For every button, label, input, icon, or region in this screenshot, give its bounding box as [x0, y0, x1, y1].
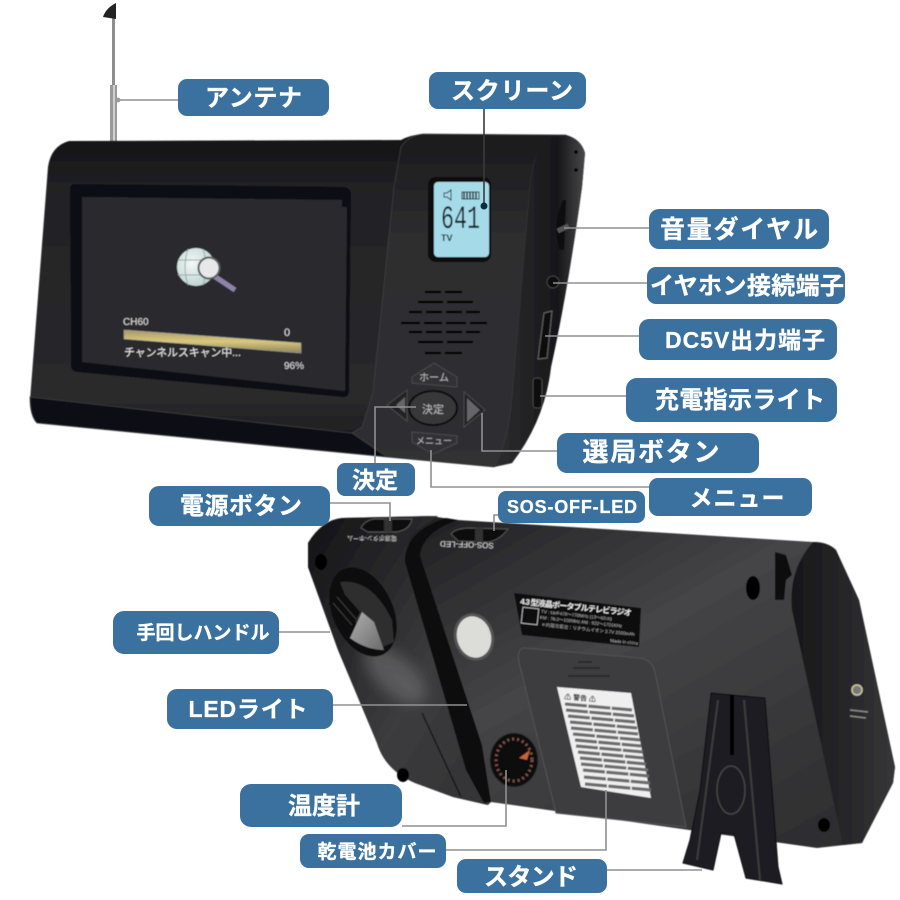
scan status text: チャンネルスキャン中...	[124, 346, 241, 359]
kickstand	[683, 693, 782, 884]
label: アンテナ	[178, 79, 329, 116]
battery door seam	[422, 713, 461, 797]
leader lines	[116, 98, 702, 870]
label: 乾電池カバー	[300, 834, 446, 868]
label: イヤホン接続端子: イヤホン接続端子	[650, 273, 844, 300]
label: 決定: 決定	[352, 467, 398, 493]
front device photo	[30, 134, 585, 467]
label: 電源ボタン: 電源ボタン	[180, 493, 302, 520]
dark seam stripe	[405, 518, 491, 803]
warning sticker	[557, 687, 651, 798]
back device photo	[308, 516, 895, 884]
control buttons: 決定	[422, 403, 444, 416]
label: SOS-OFF-LED	[498, 491, 645, 523]
label: DC5V出力端子	[639, 319, 837, 360]
control buttons	[387, 363, 485, 454]
battery cover	[519, 648, 686, 827]
scan status text	[123, 317, 304, 372]
antenna	[103, 3, 117, 142]
label: スクリーン: スクリーン	[451, 78, 573, 105]
light sheen under crank	[355, 636, 435, 714]
LED light	[448, 609, 500, 665]
thermometer	[490, 733, 538, 787]
control buttons: ホーム	[419, 372, 449, 384]
label: LEDライト	[167, 689, 333, 729]
black spec label: ＊内蔵充電池：リチウムイオン 3.7V 2000mAh	[541, 621, 636, 638]
screen bezel	[70, 184, 351, 397]
label: DC5V出力端子: DC5V出力端子	[665, 327, 825, 353]
label: LEDライト: LEDライト	[188, 696, 308, 722]
label: 温度計	[240, 784, 402, 827]
label: 手回しハンドル: 手回しハンドル	[136, 622, 270, 644]
scan status text: 96%	[284, 361, 304, 372]
black spec label: 4.3 型液晶ポータブルテレビラジオ	[520, 596, 632, 618]
top switches	[347, 519, 508, 550]
label: 決定	[337, 463, 415, 496]
control panel section	[352, 134, 566, 467]
back body	[308, 516, 895, 848]
LCD display: 641	[441, 201, 480, 238]
label: 乾電池カバー: 乾電池カバー	[318, 841, 436, 863]
label: メニュー	[649, 478, 812, 516]
top switches: 電源ボタン-ホーム	[347, 534, 397, 542]
label: 音量ダイヤル	[649, 209, 829, 249]
hand crank handle	[316, 557, 410, 667]
scan status text: CH60	[123, 317, 149, 328]
speaker grille	[401, 292, 487, 353]
screen	[82, 197, 347, 391]
side panel	[494, 135, 585, 467]
label: 温度計: 温度計	[288, 793, 360, 820]
label: スタンド: スタンド	[484, 864, 578, 891]
label: 音量ダイヤル: 音量ダイヤル	[660, 215, 818, 244]
scan status text: 0	[284, 327, 290, 339]
LCD display	[428, 177, 491, 262]
label: スタンド	[457, 859, 607, 893]
side ports	[533, 150, 578, 408]
label: スクリーン	[429, 72, 586, 109]
black spec label: TV : UHF470～770MHz (13～62ch)	[541, 609, 613, 621]
left end cap	[308, 516, 488, 805]
label: 電源ボタン	[149, 486, 330, 526]
top switches: SOS-OFF-LED	[440, 539, 494, 550]
screw holes and rear details	[315, 552, 868, 832]
icon: globe and magnifier	[177, 248, 235, 290]
label: 充電指示ライト: 充電指示ライト	[655, 387, 825, 414]
label: 選局ボタン: 選局ボタン	[582, 437, 720, 467]
black spec label	[514, 593, 641, 647]
control buttons: メニュー	[416, 436, 452, 446]
device body	[30, 134, 585, 467]
label: アンテナ: アンテナ	[205, 85, 302, 112]
label: 充電指示ライト	[626, 378, 837, 422]
label: SOS-OFF-LED: SOS-OFF-LED	[507, 497, 637, 517]
lower band	[30, 393, 387, 457]
label: 手回しハンドル	[113, 611, 279, 654]
right side panel	[791, 542, 895, 845]
LCD display: TV	[441, 233, 453, 243]
label: メニュー: メニュー	[690, 485, 784, 511]
black spec label: Made in china	[610, 638, 639, 646]
warning sticker: ⚠ 警告 ⚠	[564, 692, 596, 704]
label: 選局ボタン	[557, 433, 759, 473]
black spec label: FM : 76.0～108MHz AM : 522～1701KHz	[540, 615, 623, 629]
